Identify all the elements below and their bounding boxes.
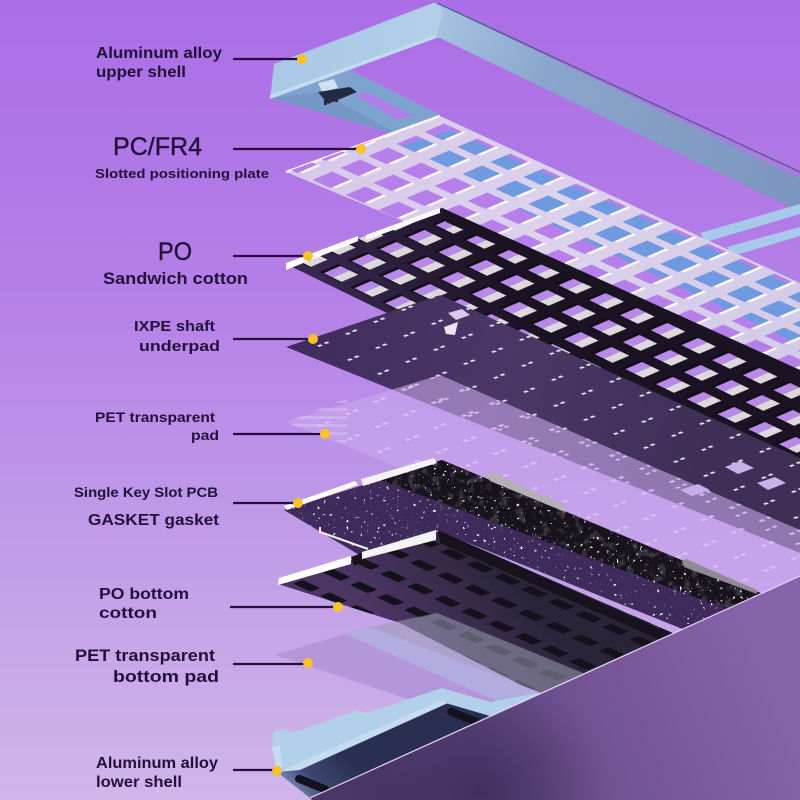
label: IXPE shaft underpad: IXPE shaft (134, 318, 215, 335)
label: PO bottom cotton (99, 586, 343, 622)
label: single key slot PCB and gasket: GASKET gasket (88, 512, 220, 529)
label: PO sandwich cotton: PO (158, 238, 192, 266)
label: single key slot PCB and gasket: Single Key Slot PCB (74, 484, 218, 500)
label: single key slot PCB and gasket (74, 484, 303, 529)
label: PO bottom cotton: cotton (99, 605, 157, 622)
label: aluminum alloy upper shell (96, 45, 307, 81)
front slot (294, 774, 330, 794)
PET transparent pad (285, 375, 800, 628)
PO bottom cotton (278, 530, 700, 710)
IXPE shaft underpad (286, 295, 800, 553)
PO sandwich cotton (286, 208, 800, 500)
white gasket strips (284, 458, 757, 594)
icon: switch mechanism (318, 79, 357, 105)
label: PO bottom cotton: PO bottom (99, 586, 189, 603)
label: PET transparent bottom pad: bottom pad (113, 667, 219, 686)
rear shell support bars (700, 204, 800, 256)
rear slot (446, 707, 482, 727)
foreground assembled keyboard corner (310, 576, 800, 800)
label: aluminum alloy upper shell: upper shell (96, 64, 186, 81)
aluminum alloy lower shell (272, 688, 537, 798)
label: aluminum alloy upper shell: Aluminum alloy (96, 45, 222, 62)
PET transparent bottom pad (275, 613, 600, 716)
label: PC/FR4 plate (95, 133, 366, 181)
label: aluminum alloy lower shell: lower shell (96, 774, 182, 791)
label: aluminum alloy lower shell (96, 755, 282, 791)
label: PET transparent pad (95, 409, 330, 443)
label: PET transparent pad: pad (191, 427, 219, 443)
label: IXPE shaft underpad: underpad (139, 338, 220, 355)
label: PC/FR4 plate: Slotted positioning plate (95, 166, 269, 181)
label: PET transparent bottom pad (75, 646, 313, 686)
label: PC/FR4 plate: PC/FR4 (113, 133, 202, 161)
label: PET transparent pad: PET transparent (95, 409, 215, 425)
label: PO sandwich cotton (103, 238, 313, 288)
slotted positioning plate (286, 116, 800, 380)
label: PO sandwich cotton: Sandwich cotton (103, 269, 248, 288)
single key slot PCB with gasket (280, 455, 775, 635)
label: IXPE shaft underpad (134, 318, 318, 355)
aluminum alloy upper shell (270, 3, 800, 212)
label: aluminum alloy lower shell: Aluminum alloy (96, 755, 218, 772)
label: PET transparent bottom pad: PET transparent (75, 646, 215, 665)
